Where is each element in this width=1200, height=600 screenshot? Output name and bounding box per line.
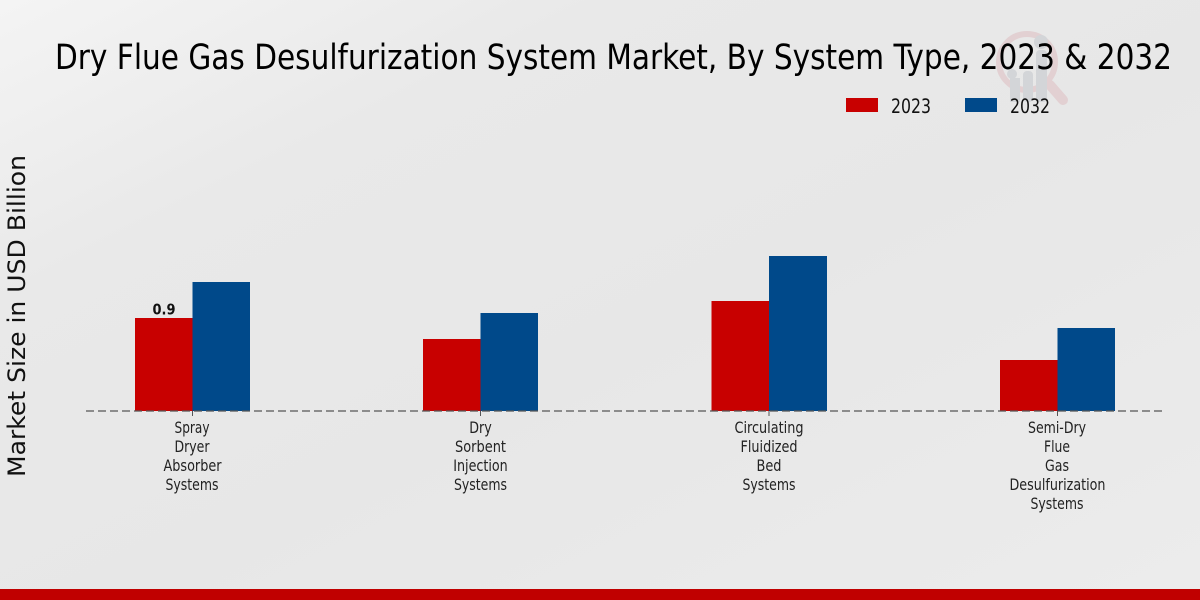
group: Circulating Fluidized Bed Systems xyxy=(712,256,827,411)
label: Dry Sorbent Injection Systems: Dry xyxy=(469,418,492,437)
bottom band xyxy=(0,589,1200,600)
label: Circulating Fluidized Bed Systems: Systems xyxy=(742,475,796,494)
bar chart xyxy=(86,256,1164,416)
label: Dry Sorbent Injection Systems: Systems xyxy=(454,475,507,494)
group: Spray Dryer Absorber Systems: 0.9 xyxy=(152,300,176,318)
group: Spray Dryer Absorber Systems xyxy=(135,282,250,411)
label: Semi-Dry Flue Gas Desulfurization Systems xyxy=(1010,418,1106,513)
label: Spray Dryer Absorber Systems: Spray xyxy=(174,418,210,437)
baseline axis xyxy=(86,411,1164,416)
label: Semi-Dry Flue Gas Desulfurization Systems: Gas xyxy=(1045,456,1069,475)
label: Semi-Dry Flue Gas Desulfurization Systems: Flue xyxy=(1044,437,1070,456)
label: Semi-Dry Flue Gas Desulfurization Systems: Desulfurization xyxy=(1010,475,1106,494)
label: Spray Dryer Absorber Systems: Systems xyxy=(166,475,218,494)
label: Circulating Fluidized Bed Systems: Bed xyxy=(756,456,782,475)
label: Semi-Dry Flue Gas Desulfurization Systems: Semi-Dry xyxy=(1028,418,1086,437)
title: Dry Flue Gas Desulfurization System Market, By System Type, 2023 & 2032 xyxy=(55,38,1172,78)
legend: 2032 xyxy=(1010,95,1050,118)
legend xyxy=(846,95,1050,118)
label: Dry Sorbent Injection Systems: Injection xyxy=(453,456,508,475)
y-axis label: Market Size in USD Billion xyxy=(3,155,31,477)
watermark logo xyxy=(999,34,1063,102)
label: Circulating Fluidized Bed Systems: Circulating xyxy=(734,418,804,437)
label: Circulating Fluidized Bed Systems xyxy=(734,418,804,494)
label: Spray Dryer Absorber Systems: Dryer xyxy=(174,437,210,456)
label: Semi-Dry Flue Gas Desulfurization Systems: Systems xyxy=(1030,494,1084,513)
label: Dry Sorbent Injection Systems: Sorbent xyxy=(455,437,506,456)
label: Spray Dryer Absorber Systems: Absorber xyxy=(164,456,222,475)
label: Dry Sorbent Injection Systems xyxy=(453,418,508,494)
group: Semi-Dry Flue Gas Desulfurization Systems xyxy=(1000,328,1115,411)
group: Dry Sorbent Injection Systems xyxy=(423,313,538,411)
label: Circulating Fluidized Bed Systems: Fluidized xyxy=(740,437,798,456)
x-axis labels xyxy=(164,418,1106,513)
legend: 2023 xyxy=(891,95,931,118)
label: Spray Dryer Absorber Systems xyxy=(164,418,222,494)
